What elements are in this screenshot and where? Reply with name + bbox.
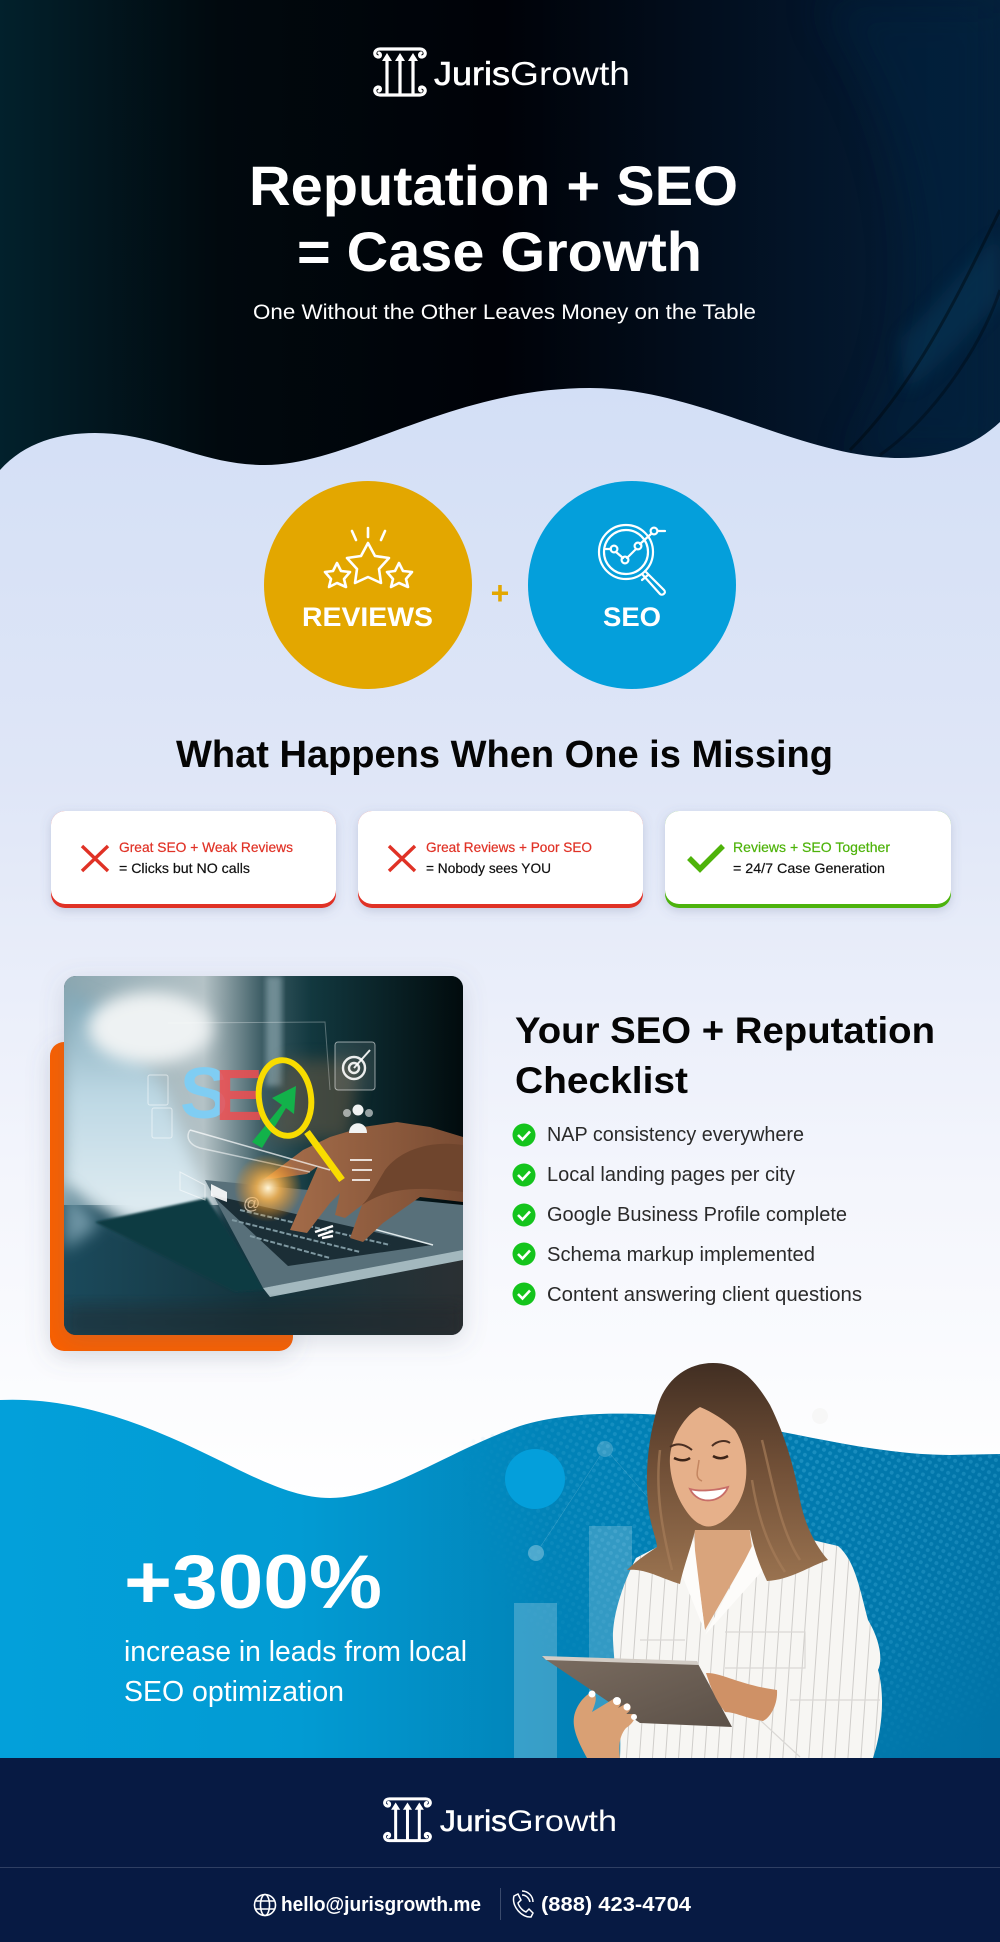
phone number: (888) 423-4704 [541, 1894, 692, 1916]
photo: hand on laptop with SEO overlay: @ [243, 1194, 260, 1213]
card text: = Nobody sees YOU [426, 860, 551, 876]
card: great reviews poor seo [358, 811, 643, 908]
logo: JurisGrowth header [375, 49, 630, 95]
label: seo: SEO [603, 602, 661, 632]
orange backing panel [50, 1042, 293, 1351]
wordmark: Growth [510, 55, 630, 92]
icon: red x [389, 846, 415, 871]
icon: globe [254, 1894, 276, 1916]
stat: +300%: +300% [124, 1540, 382, 1625]
stat panel: blue wave background [0, 1400, 1000, 1758]
card text [733, 839, 890, 876]
subtitle: One Without the Other Leaves Money on the Table [253, 301, 756, 324]
card text: Great SEO + Weak Reviews [119, 839, 293, 855]
wordmark: Juris [434, 55, 510, 92]
title [249, 154, 738, 283]
left hand [574, 1692, 634, 1758]
team icon [343, 1104, 373, 1133]
SEO overlay letters [182, 1067, 260, 1120]
item: google profile: Google Business Profile complete [547, 1204, 847, 1226]
card text [119, 839, 293, 876]
footer panel [0, 1758, 1000, 1942]
heading: what happens: What Happens When One is Missing [176, 734, 833, 776]
title: Reputation + SEO [249, 154, 738, 217]
item: NAP: NAP consistency everywhere [547, 1124, 804, 1146]
envelope and symbols [211, 1184, 227, 1202]
checklist items [512, 1124, 862, 1306]
face [670, 1407, 746, 1527]
hair [627, 1363, 828, 1584]
card text: = Clicks but NO calls [119, 860, 250, 876]
card: great seo weak reviews [51, 811, 336, 908]
plus sign: + [491, 575, 509, 611]
SEO overlay letters: E [215, 1056, 263, 1136]
checklist heading: Checklist [515, 1060, 688, 1101]
right hand [706, 1673, 777, 1721]
nails [588, 1690, 637, 1720]
icon: column with arrows [385, 1799, 430, 1841]
stat description: increase in leads from local [124, 1636, 467, 1668]
label: reviews: REVIEWS [302, 602, 433, 632]
icon: three stars [325, 528, 412, 587]
SEO overlay letters: S [180, 1054, 228, 1134]
checklist heading [515, 1010, 935, 1101]
equation: reviews + seo [264, 481, 736, 689]
tablet [542, 1657, 732, 1727]
card: reviews and seo together [665, 811, 951, 908]
item: local pages: Local landing pages per city [547, 1164, 795, 1186]
circle: reviews [264, 481, 472, 689]
wordmark: Growth [507, 1805, 617, 1838]
card text: Great Reviews + Poor SEO [426, 839, 592, 855]
touch glow [234, 1154, 302, 1222]
collar [680, 1526, 770, 1635]
card text [426, 839, 592, 876]
stat description: SEO optimization [124, 1676, 344, 1708]
icon: magnifier with chart [599, 525, 665, 595]
icon: phone [513, 1891, 533, 1917]
light section background with wave top edge [0, 388, 1000, 1500]
hand [263, 1122, 463, 1242]
item: content: Content answering client questions [547, 1284, 862, 1306]
hero panel: dark header background [0, 0, 1000, 500]
hair highlights [658, 1440, 800, 1572]
shirt [613, 1530, 882, 1758]
circle: seo [528, 481, 736, 689]
green arrow [252, 1086, 296, 1148]
yellow magnifier [254, 1057, 342, 1180]
overlay panels [148, 1022, 375, 1200]
neck and chest [694, 1500, 752, 1630]
photo: hand on laptop with SEO overlay [64, 976, 463, 1340]
card text: = 24/7 Case Generation [733, 860, 885, 876]
pocket seam and cuff shadow [640, 1632, 880, 1757]
decorative chart: bars and dots [505, 1408, 828, 1758]
woman holding tablet [542, 1363, 882, 1758]
facial features [670, 1441, 730, 1500]
wordmark: Juris [440, 1805, 507, 1838]
icon: green check [689, 846, 723, 869]
cards row [51, 811, 951, 908]
stat description [124, 1636, 467, 1708]
item: schema: Schema markup implemented [547, 1244, 815, 1266]
email: hello@jurisgrowth.me [281, 1894, 481, 1916]
icon: column with arrows [375, 49, 425, 95]
checklist heading: Your SEO + Reputation [515, 1010, 935, 1051]
contact divider [500, 1888, 501, 1920]
title: = Case Growth [297, 220, 702, 283]
footer logo [385, 1799, 617, 1841]
card text: Reviews + SEO Together [733, 839, 890, 855]
icon: red x [82, 846, 108, 871]
